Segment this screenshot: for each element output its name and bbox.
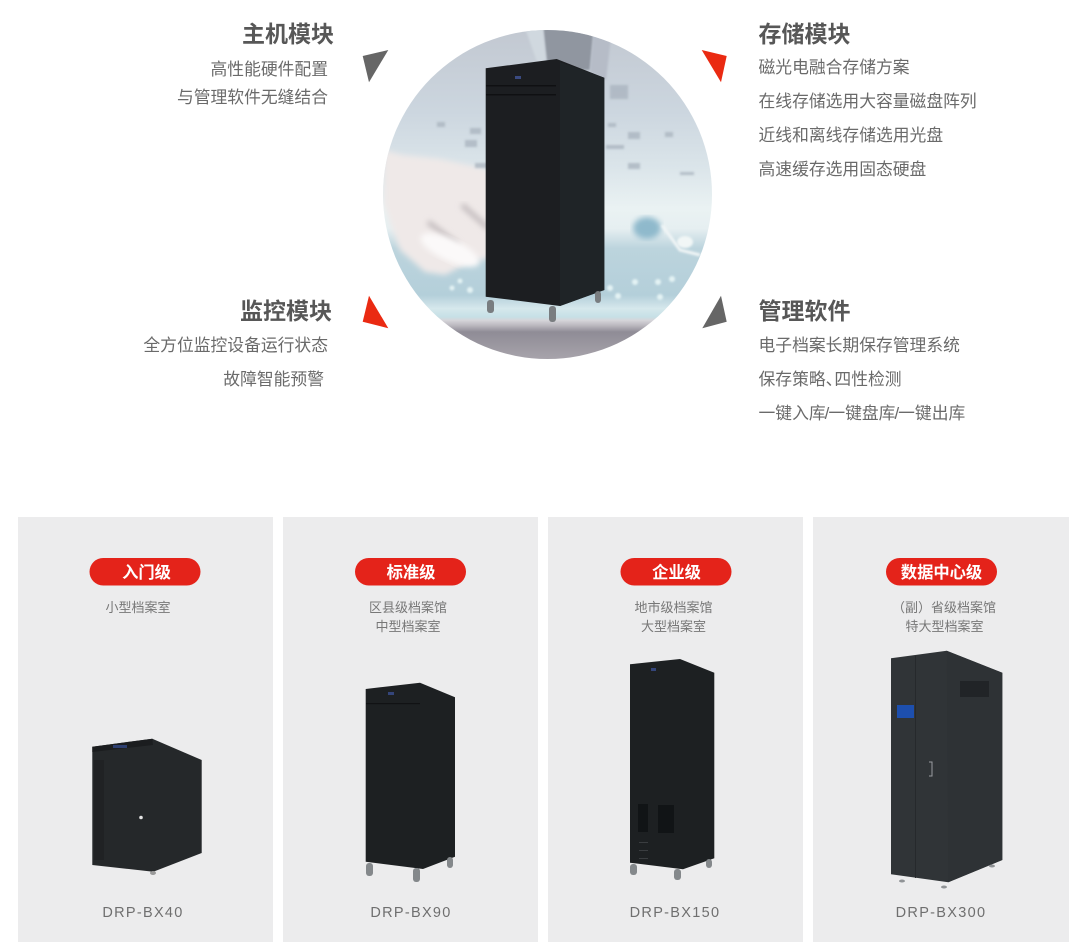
storage module description: 近线和离线存储选用光盘	[758, 126, 943, 145]
storage module description: 高速缓存选用固态硬盘	[758, 160, 927, 179]
arrow: top left	[363, 50, 388, 82]
product: DRP-BX150	[630, 659, 714, 880]
panel: hero circle with main cabinet	[380, 28, 716, 362]
product: DRP-BX90	[366, 683, 455, 882]
heading: host module: 主机模块	[242, 21, 334, 47]
description: 大型档案室	[641, 619, 706, 634]
hero photo background	[380, 28, 716, 362]
description: 特大型档案室	[905, 619, 984, 634]
storage module description: 磁光电融合存储方案	[758, 58, 910, 77]
description	[892, 600, 996, 634]
panel: standard level	[283, 517, 538, 942]
badge: enterprise level: 企业级	[652, 563, 701, 582]
monitoring module description: 全方位监控设备运行状态	[143, 336, 328, 355]
badge: enterprise level	[620, 558, 732, 586]
heading: management software: 管理软件	[758, 298, 850, 324]
host module description: 高性能硬件配置	[211, 60, 328, 79]
description	[634, 600, 713, 634]
model name: DRP-BX40	[102, 905, 184, 921]
monitoring module description: 故障智能预警	[223, 370, 324, 389]
text block: host module	[177, 21, 334, 107]
description: 地市级档案馆	[634, 600, 713, 615]
badge: data center level: 数据中心级	[901, 563, 982, 582]
management software description	[758, 336, 965, 423]
badge: entry level: 入门级	[122, 563, 171, 582]
management software description: 电子档案长期保存管理系统	[758, 336, 960, 355]
model name: DRP-BX300	[896, 905, 986, 921]
badge: standard level	[355, 558, 466, 586]
badge: data center level	[886, 558, 997, 586]
host module description: 与管理软件无缝结合	[177, 88, 328, 107]
arrow: bottom right	[702, 296, 727, 328]
panel: entry level	[18, 517, 273, 942]
product: DRP-BX40	[92, 739, 202, 875]
description: 中型档案室	[375, 619, 441, 634]
host module description	[177, 60, 328, 107]
panel: enterprise level	[548, 517, 803, 942]
text block: storage module	[758, 21, 977, 179]
description: 区县级档案馆	[369, 600, 447, 615]
management software description: 保存策略、四性检测	[758, 370, 902, 389]
description: 小型档案室	[105, 600, 171, 615]
management software description: 一键入库/一键盘库/一键出库	[758, 404, 965, 423]
description: （副）省级档案馆	[892, 600, 996, 615]
description	[369, 600, 447, 634]
model name: DRP-BX90	[370, 905, 452, 921]
arrow: bottom left	[363, 296, 388, 328]
text block: management software	[758, 298, 965, 423]
heading: storage module: 存储模块	[758, 21, 850, 47]
panel: data center level	[813, 517, 1069, 942]
model name: DRP-BX150	[630, 905, 720, 921]
storage module description: 在线存储选用大容量磁盘阵列	[758, 92, 977, 111]
arrow: top right	[702, 50, 727, 82]
text block: monitoring module	[143, 298, 332, 389]
badge: entry level	[90, 558, 200, 586]
heading: monitoring module: 监控模块	[240, 298, 332, 324]
storage module description	[758, 58, 977, 179]
monitoring module description	[143, 336, 328, 389]
badge: standard level: 标准级	[387, 563, 435, 582]
main cabinet	[486, 59, 604, 322]
product: DRP-BX300	[891, 651, 1002, 888]
casters	[487, 291, 601, 322]
